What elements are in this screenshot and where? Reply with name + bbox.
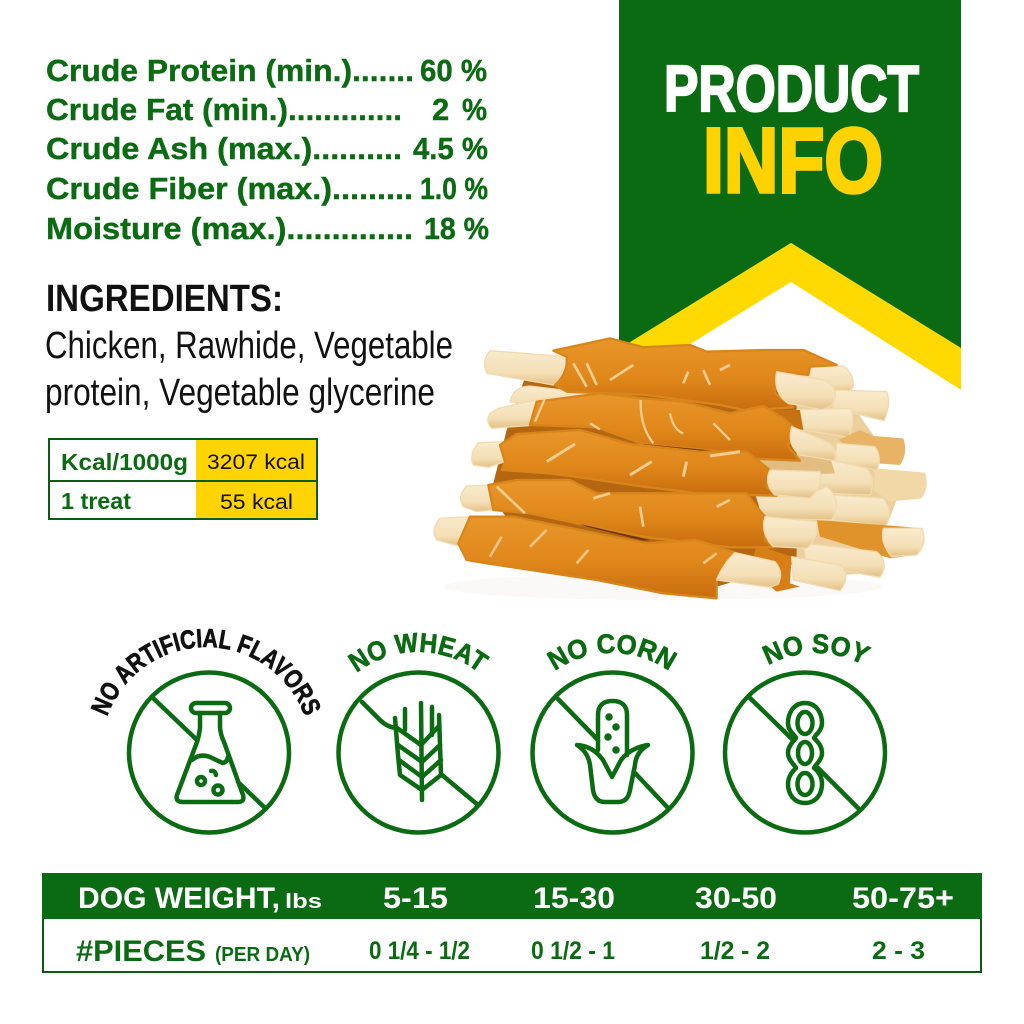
text block: guaranteed analysis: Moisture (max.).............. xyxy=(46,211,413,246)
badge: no wheat xyxy=(336,632,501,835)
text block: guaranteed analysis: 60 % xyxy=(420,53,487,88)
row: pieces per day: #PIECES xyxy=(76,935,206,968)
text block: guaranteed analysis: 4.5 % xyxy=(413,131,488,166)
icon: corn xyxy=(557,698,668,808)
table: calories: 55 kcal xyxy=(220,491,293,514)
text block: guaranteed analysis xyxy=(46,53,489,246)
text block: ingredients: protein, Vegetable glycerine xyxy=(45,372,435,414)
badge: no artificial flavors xyxy=(90,628,320,835)
icon: flask xyxy=(153,698,265,808)
row: pieces per day: 1/2 - 2 xyxy=(700,937,770,965)
row: pieces per day: (PER DAY) xyxy=(215,944,310,966)
table: calories: Kcal/1000g xyxy=(61,449,188,475)
table: calories: 1 treat xyxy=(61,488,131,514)
panel: product info banner xyxy=(619,0,961,430)
row: pieces per day: 0 1/4 - 1/2 xyxy=(369,937,470,965)
badge: no artificial flavors: NO ARTIFICIAL FLAVORS xyxy=(90,628,320,716)
text block: guaranteed analysis: Crude Ash (max.).......... xyxy=(46,131,402,166)
icon: soybean pod xyxy=(750,698,858,808)
stick 4 xyxy=(461,485,493,512)
badge: no corn: NO CORN xyxy=(546,634,678,670)
row: pieces per day: 2 - 3 xyxy=(872,937,925,965)
badge: no soy xyxy=(722,634,888,835)
header row: dog weight: 5-15 xyxy=(383,882,448,915)
text block: ingredients xyxy=(45,278,453,414)
header row: dog weight: 50-75+ xyxy=(852,882,954,915)
header row: dog weight xyxy=(78,882,954,915)
table: calories: 3207 kcal xyxy=(207,451,305,474)
row: pieces per day: 0 1/2 - 1 xyxy=(531,937,615,965)
heading: product: PRODUCT xyxy=(664,52,919,125)
back sticks xyxy=(510,386,590,410)
text block: guaranteed analysis: Crude Fiber (max.)......... xyxy=(46,171,413,206)
text block: guaranteed analysis: 2 xyxy=(432,92,449,127)
text block: ingredients: Chicken, Rawhide, Vegetable xyxy=(45,325,453,367)
text block: ingredients: INGREDIENTS: xyxy=(46,278,283,320)
stick 3 xyxy=(472,442,507,467)
text block: guaranteed analysis: Crude Fat (min.)............. xyxy=(46,92,402,127)
table: feeding guide xyxy=(42,873,982,972)
backing fill xyxy=(490,363,830,587)
product photo: stack of chicken-wrapped rawhide sticks xyxy=(434,338,927,600)
header row: dog weight: DOG WEIGHT, xyxy=(78,882,280,915)
header row: dog weight: 30-50 xyxy=(695,882,777,915)
badge: no soy: NO SOY xyxy=(762,634,872,665)
stick 2 xyxy=(488,398,543,428)
icon: wheat xyxy=(362,702,478,805)
badge: no corn xyxy=(530,634,695,835)
stick 1 xyxy=(485,351,567,385)
header row: dog weight: lbs xyxy=(285,891,322,913)
stick 5 xyxy=(434,517,472,546)
header row: dog weight: 15-30 xyxy=(533,882,615,915)
row: pieces per day xyxy=(76,935,925,968)
text block: guaranteed analysis: Crude Protein (min.)....... xyxy=(46,53,414,88)
heading: info: INFO xyxy=(703,110,883,212)
table: calories xyxy=(49,439,317,519)
text block: guaranteed analysis: % xyxy=(462,92,487,127)
text block: guaranteed analysis: 1.0 % xyxy=(420,171,488,206)
yellow chevron xyxy=(619,243,961,390)
text block: guaranteed analysis: 18 % xyxy=(424,211,489,246)
badge: no wheat: NO WHEAT xyxy=(347,632,490,672)
